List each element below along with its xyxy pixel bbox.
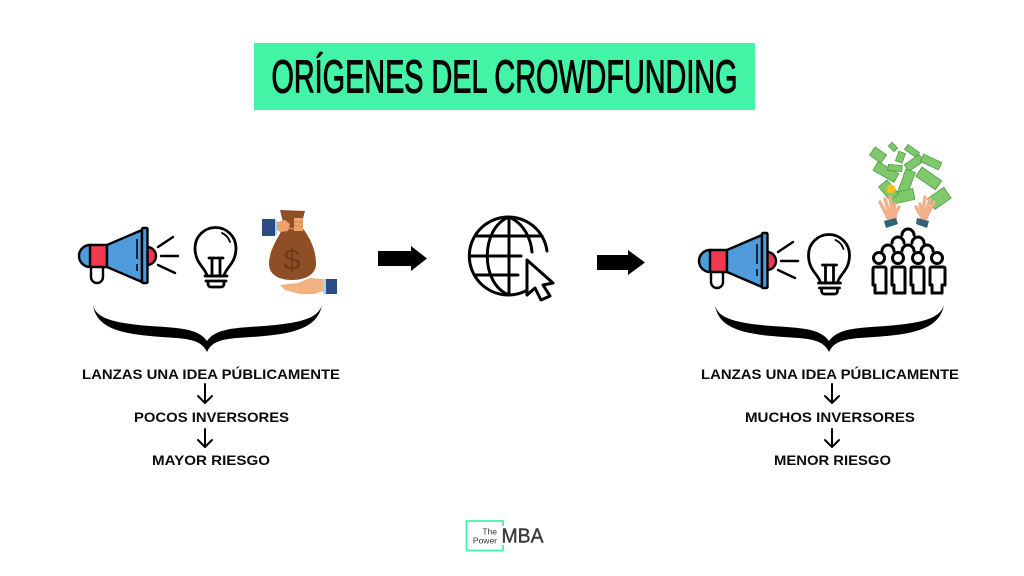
arrow: to internet	[378, 246, 427, 271]
logo: The Power MBA: The	[482, 526, 497, 536]
icon: right hand	[916, 197, 934, 228]
icon: coin	[886, 184, 896, 194]
icon: money bag between hands: $	[284, 244, 301, 277]
logo: The Power MBA: Power	[473, 536, 497, 546]
panel: crowdfunding	[699, 142, 951, 294]
brace: right	[715, 305, 944, 352]
text: right steps	[701, 365, 959, 468]
logo: The Power MBA	[466, 521, 544, 550]
icon: megaphone right	[699, 233, 798, 288]
icon: crowd of people	[873, 229, 945, 293]
icon: money bag between hands	[262, 210, 337, 294]
arrow: down right	[825, 384, 839, 403]
icon: megaphone	[79, 228, 178, 283]
text: left steps: LANZAS UNA IDEA PÚBLICAMENTE	[82, 365, 340, 382]
brace: left	[93, 305, 322, 352]
text: left steps	[82, 365, 340, 468]
logo: The Power MBA: MBA	[502, 526, 544, 548]
text: right steps: MUCHOS INVERSORES	[745, 409, 915, 425]
text: left steps: POCOS INVERSORES	[134, 409, 289, 425]
text: right steps: MENOR RIESGO	[774, 452, 891, 468]
icon: falling money	[869, 142, 951, 209]
icon: globe with cursor	[469, 217, 553, 300]
arrow: down second	[198, 429, 212, 447]
arrow: down right second	[825, 429, 839, 447]
icon: light bulb right	[808, 234, 850, 294]
icon: light bulb	[195, 228, 236, 287]
icon: left hand	[880, 197, 899, 228]
panel: traditional funding	[79, 210, 337, 294]
text: right steps: LANZAS UNA IDEA PÚBLICAMENTE	[701, 365, 959, 382]
title	[254, 43, 755, 110]
arrow: down	[198, 384, 212, 403]
arrow: to crowd	[597, 250, 645, 275]
text: left steps: MAYOR RIESGO	[152, 452, 270, 468]
title: ORÍGENES DEL CROWDFUNDING	[272, 50, 738, 102]
